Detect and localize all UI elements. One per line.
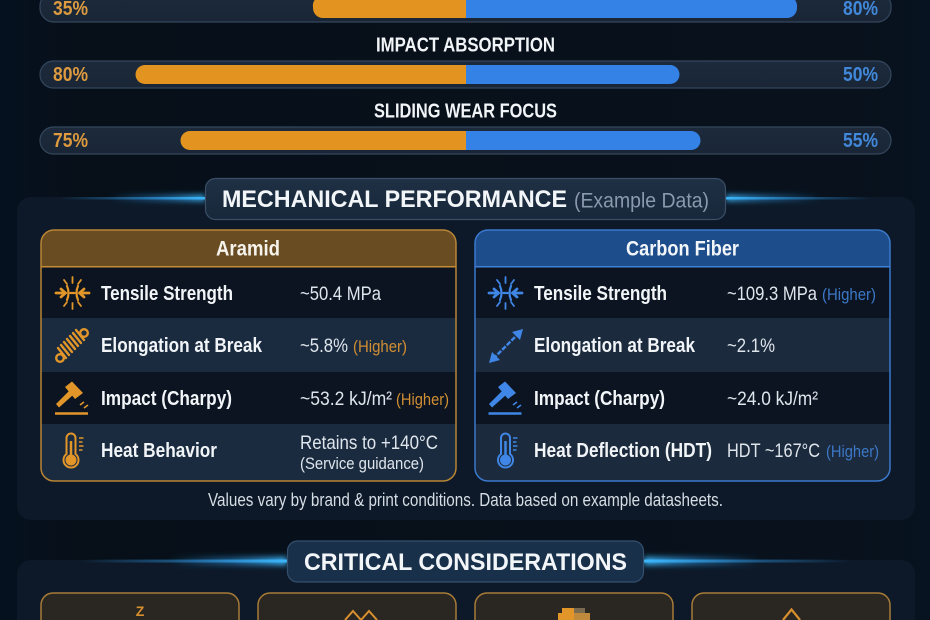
- icon: warning triangle: [783, 610, 800, 620]
- row: heat deflection: (Higher): [826, 442, 879, 461]
- row: tensile strength: ~109.3 MPa: [727, 283, 817, 305]
- row: heat behavior: (Service guidance): [300, 454, 424, 473]
- heading: mechanical performance: [206, 178, 726, 220]
- icon: thermometer: [64, 434, 84, 468]
- footnote: Values vary by brand & print conditions. Data based on example datasheets.: [208, 490, 723, 510]
- row: elongation at break: Elongation at Break: [534, 335, 696, 357]
- bar: impact absorption, 80% vs 50%: 80%: [53, 64, 88, 86]
- row: tensile strength: [534, 283, 876, 305]
- row: heat behavior: Heat Behavior: [101, 440, 217, 462]
- card: consideration 3: [475, 593, 673, 620]
- icon: hammer: [488, 382, 522, 414]
- card: consideration 2: [258, 593, 456, 620]
- row: elongation at break: [101, 335, 407, 357]
- card: consideration 4: [692, 593, 890, 620]
- row: heat deflection: [534, 440, 879, 462]
- icon: z glyph: Z: [136, 603, 145, 619]
- icon: machine: [558, 608, 590, 620]
- panel: critical considerations: [17, 541, 915, 620]
- label: impact absorption: IMPACT ABSORPTION: [376, 34, 555, 56]
- row: heat deflection: Heat Deflection (HDT): [534, 440, 712, 462]
- bar: sliding wear focus, 75% vs 55%: 75%: [53, 130, 88, 152]
- heading: mechanical performance: MECHANICAL PERFORMANCE: [222, 186, 567, 213]
- row: elongation at break: ~5.8%: [300, 335, 348, 357]
- row: impact charpy: [101, 388, 449, 410]
- bar: sliding wear focus, 75% vs 55%: 55%: [843, 130, 878, 152]
- icon: double arrow: [489, 329, 523, 363]
- row: impact charpy: (Higher): [396, 390, 449, 409]
- icon: tensile strength: [56, 277, 89, 309]
- icon: thermometer: [498, 434, 518, 468]
- row: heat behavior: [101, 432, 438, 473]
- row: elongation at break: ~2.1%: [727, 335, 775, 357]
- row: impact charpy: Impact (Charpy): [101, 388, 232, 410]
- label: sliding wear focus: SLIDING WEAR FOCUS: [374, 100, 557, 122]
- bar: first metric, 35% vs 80%: [40, 0, 891, 22]
- heading: mechanical performance: (Example Data): [574, 190, 709, 212]
- bar: impact absorption, 80% vs 50%: 50%: [843, 64, 878, 86]
- row: tensile strength: [101, 283, 381, 305]
- row: elongation at break: Elongation at Break: [101, 335, 263, 357]
- icon: spring: [56, 329, 88, 362]
- card: carbon fiber: [475, 230, 890, 481]
- row: tensile strength: ~50.4 MPa: [300, 283, 381, 305]
- row: impact charpy: Impact (Charpy): [534, 388, 665, 410]
- row: elongation at break: (Higher): [353, 337, 407, 356]
- row: heat behavior: Retains to +140°C: [300, 432, 438, 454]
- icon: peaks: [345, 611, 377, 620]
- bar: sliding wear focus, 75% vs 55%: [40, 127, 891, 154]
- row: tensile strength: Tensile Strength: [101, 283, 233, 305]
- row: tensile strength: Tensile Strength: [534, 283, 667, 305]
- row: impact charpy: [534, 388, 818, 410]
- icon: hammer: [55, 382, 88, 414]
- row: heat deflection: HDT ~167°C: [727, 440, 820, 462]
- comparison bars: [40, 0, 891, 154]
- heading: critical considerations: CRITICAL CONSIDERATIONS: [304, 549, 627, 576]
- card: aramid: [41, 230, 456, 481]
- panel: mechanical performance: [17, 178, 915, 520]
- card: consideration 1: [41, 593, 239, 620]
- card title: carbon fiber: Carbon Fiber: [626, 236, 740, 260]
- row: impact charpy: ~53.2 kJ/m²: [300, 388, 392, 410]
- bar: impact absorption, 80% vs 50%: [40, 61, 891, 88]
- row: tensile strength: (Higher): [822, 285, 876, 304]
- card title: aramid: Aramid: [216, 236, 280, 260]
- icon: tensile strength: [489, 277, 522, 309]
- row: impact charpy: ~24.0 kJ/m²: [727, 388, 818, 410]
- heading: critical considerations: [288, 541, 644, 582]
